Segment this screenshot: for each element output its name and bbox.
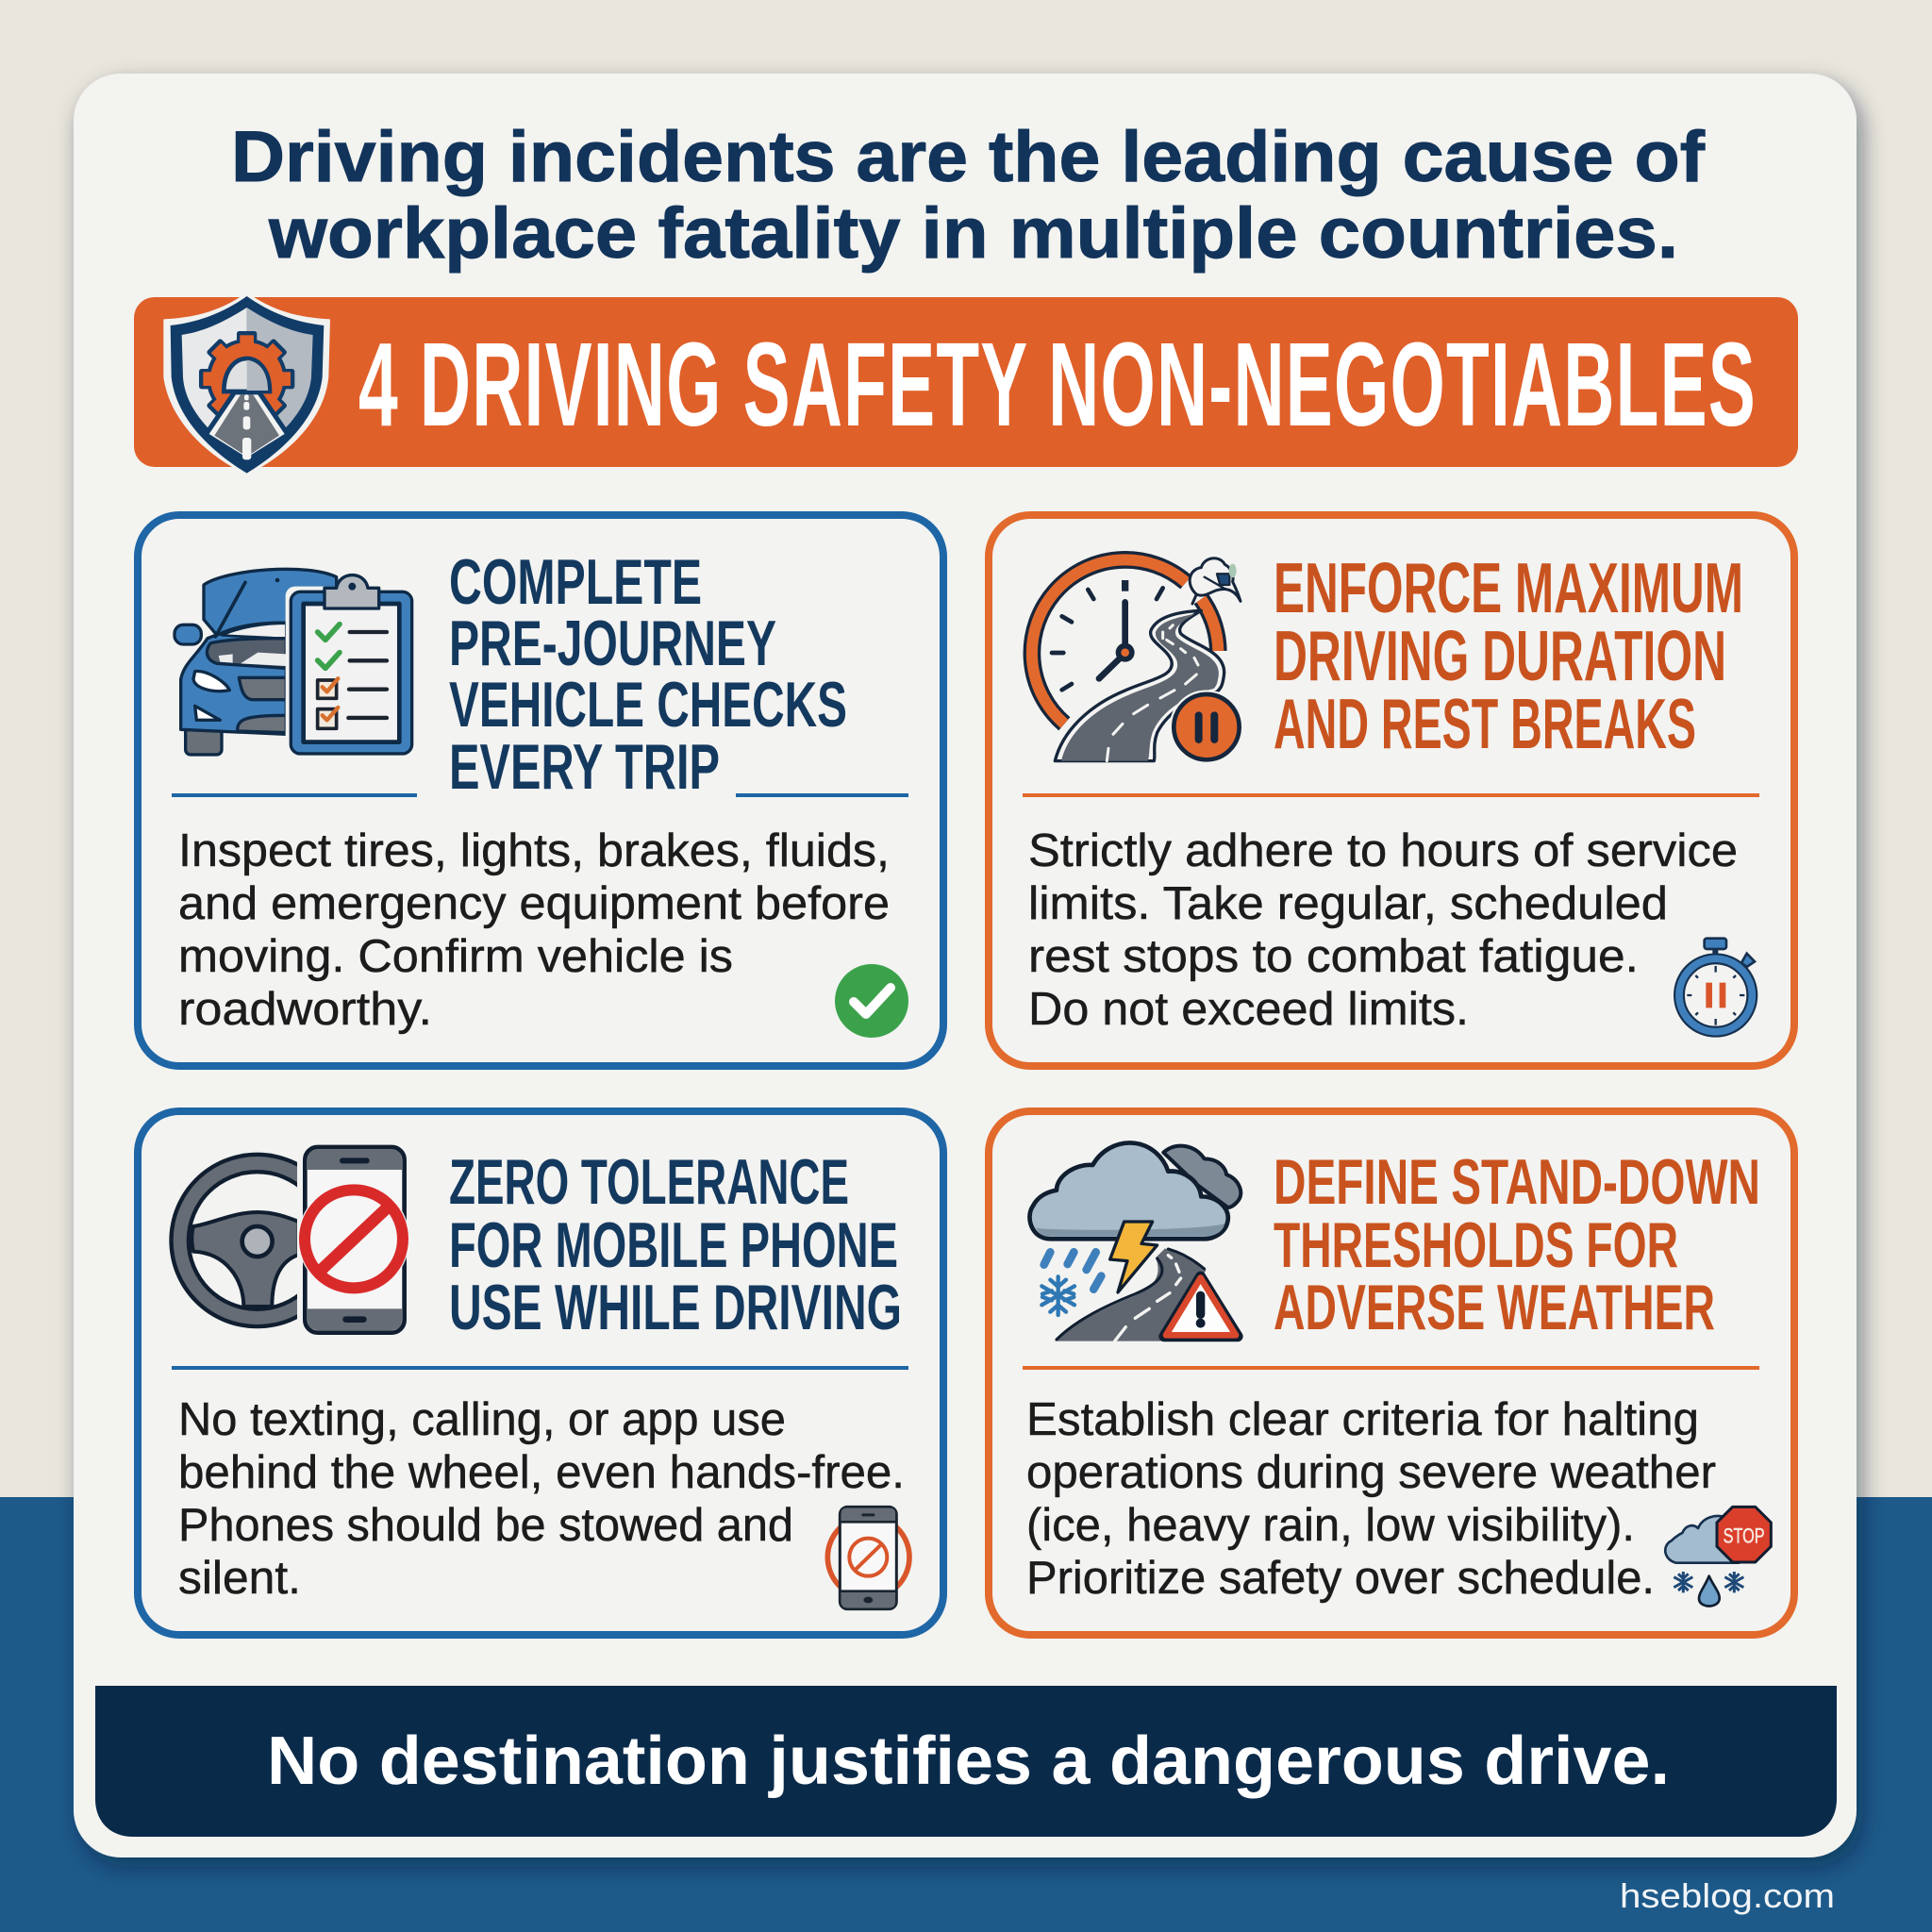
- heading: PRE-JOURNEY: [449, 608, 776, 679]
- body text: rest stops to combat fatigue.: [1028, 931, 1639, 982]
- heading: [449, 546, 847, 803]
- body text: (ice, heavy rain, low visibility).: [1026, 1500, 1635, 1551]
- panel: vehicle checks: [138, 515, 943, 1066]
- body text: [1026, 1394, 1716, 1604]
- icon: clock with road and pause: [1032, 558, 1243, 764]
- heading: FOR MOBILE PHONE: [449, 1209, 898, 1281]
- panel: adverse weather: [989, 1111, 1794, 1635]
- body text: Strictly adhere to hours of service: [1028, 825, 1738, 876]
- orange banner: [134, 297, 1798, 467]
- heading: [1274, 1146, 1760, 1343]
- body text: limits. Take regular, scheduled: [1028, 878, 1668, 929]
- panel: driving duration: [989, 515, 1794, 1066]
- bottom navy banner: [95, 1686, 1837, 1837]
- panel: mobile phone: [138, 1111, 943, 1635]
- body text: [1028, 825, 1738, 1035]
- heading: COMPLETE: [449, 546, 702, 618]
- icon: storm cloud with road and warning: [1029, 1142, 1241, 1341]
- heading: EVERY TRIP: [449, 731, 720, 803]
- heading: VEHICLE CHECKS: [449, 669, 847, 741]
- body text: operations during severe weather: [1026, 1447, 1716, 1498]
- icon: shield with gear and road: [163, 292, 330, 475]
- icon: stopwatch: [1679, 939, 1755, 1032]
- body text: silent.: [178, 1553, 301, 1604]
- heading: [1274, 548, 1743, 763]
- body text: [178, 825, 890, 1035]
- body text: and emergency equipment before: [178, 878, 890, 929]
- stop label: STOP: [1724, 1524, 1765, 1547]
- body text: behind the wheel, even hands-free.: [178, 1447, 905, 1498]
- body text: Establish clear criteria for halting: [1026, 1394, 1699, 1445]
- body text: Inspect tires, lights, brakes, fluids,: [178, 825, 890, 876]
- title: [231, 117, 1706, 274]
- body text: Phones should be stowed and: [178, 1500, 793, 1551]
- website credit: hseblog.com: [1620, 1876, 1835, 1915]
- heading: USE WHILE DRIVING: [449, 1272, 902, 1343]
- icon: car with checklist: [175, 569, 413, 758]
- icon: green check: [835, 964, 908, 1038]
- body text: No texting, calling, or app use: [178, 1394, 786, 1445]
- icon: steering wheel with prohibited phone: [169, 1140, 410, 1338]
- slogan: No destination justifies a dangerous drive.: [267, 1724, 1670, 1799]
- icon: stop cloud: [1665, 1507, 1771, 1606]
- heading: THRESHOLDS FOR: [1274, 1209, 1678, 1281]
- body text: [178, 1394, 905, 1604]
- title: Driving incidents are the leading cause of: [231, 117, 1706, 197]
- title: workplace fatality in multiple countries.: [268, 193, 1678, 274]
- body text: Do not exceed limits.: [1028, 984, 1469, 1035]
- icon: small phone prohibited: [827, 1507, 909, 1609]
- body text: moving. Confirm vehicle is: [178, 931, 733, 982]
- heading: ADVERSE WEATHER: [1274, 1272, 1715, 1343]
- body text: roadworthy.: [178, 984, 432, 1035]
- heading: [449, 1146, 902, 1343]
- body text: Prioritize safety over schedule.: [1026, 1553, 1655, 1604]
- heading: ZERO TOLERANCE: [449, 1146, 849, 1218]
